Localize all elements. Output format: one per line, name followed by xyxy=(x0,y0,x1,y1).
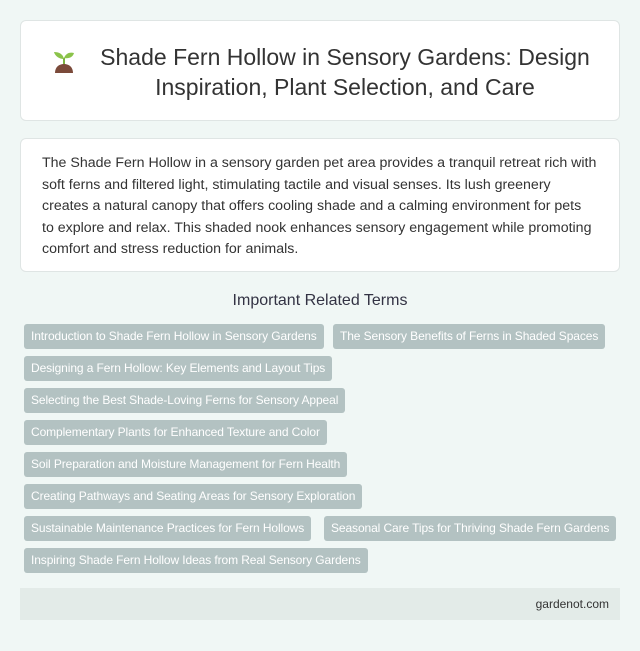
tags: related terms: Inspiring Shade Fern Hollow Ideas from Real Sensory Gardens xyxy=(31,553,361,567)
icon: seedling xyxy=(54,52,74,73)
tags: related terms: Sustainable Maintenance Practices for Fern Hollows xyxy=(31,521,304,535)
footer text: gardenot.com xyxy=(536,597,609,611)
text block: description: The Shade Fern Hollow in a sensory garden pet area provides a tranquil retreat rich with xyxy=(42,155,596,171)
text block: description xyxy=(42,155,596,257)
text block: description: to explore and relax. This shaded nook enhances sensory engagement while promoting xyxy=(42,220,591,236)
tags: related terms: Seasonal Care Tips for Thriving Shade Fern Gardens xyxy=(331,521,609,535)
text block: description: creates a natural canopy that offers cooling shade and a calming environment for pets xyxy=(42,198,581,214)
tags: related terms: Introduction to Shade Fern Hollow in Sensory Gardens xyxy=(31,329,317,343)
panel: description xyxy=(20,138,620,272)
heading: related terms: Important Related Terms xyxy=(233,292,407,309)
tags: related terms: Creating Pathways and Seating Areas for Sensory Exploration xyxy=(31,489,355,503)
tags: related terms: Designing a Fern Hollow: Key Elements and Layout Tips xyxy=(31,361,325,375)
text block: description: comfort and stress reduction for animals. xyxy=(42,241,298,257)
tags: related terms: Complementary Plants for Enhanced Texture and Color xyxy=(31,425,320,439)
text block: description: soft ferns and filtered light, stimulating tactile and visual senses. Its lush greenery xyxy=(42,176,551,192)
footer xyxy=(20,588,620,620)
tags: related terms: The Sensory Benefits of Ferns in Shaded Spaces xyxy=(340,329,598,343)
panel: title card xyxy=(20,20,620,121)
tags: related terms: Selecting the Best Shade-Loving Ferns for Sensory Appeal xyxy=(31,393,338,407)
title: Shade Fern Hollow in Sensory Gardens: Design Inspiration, Plant Selection, and Care xyxy=(100,44,590,100)
tags: related terms: Soil Preparation and Moisture Management for Fern Health xyxy=(31,457,340,471)
